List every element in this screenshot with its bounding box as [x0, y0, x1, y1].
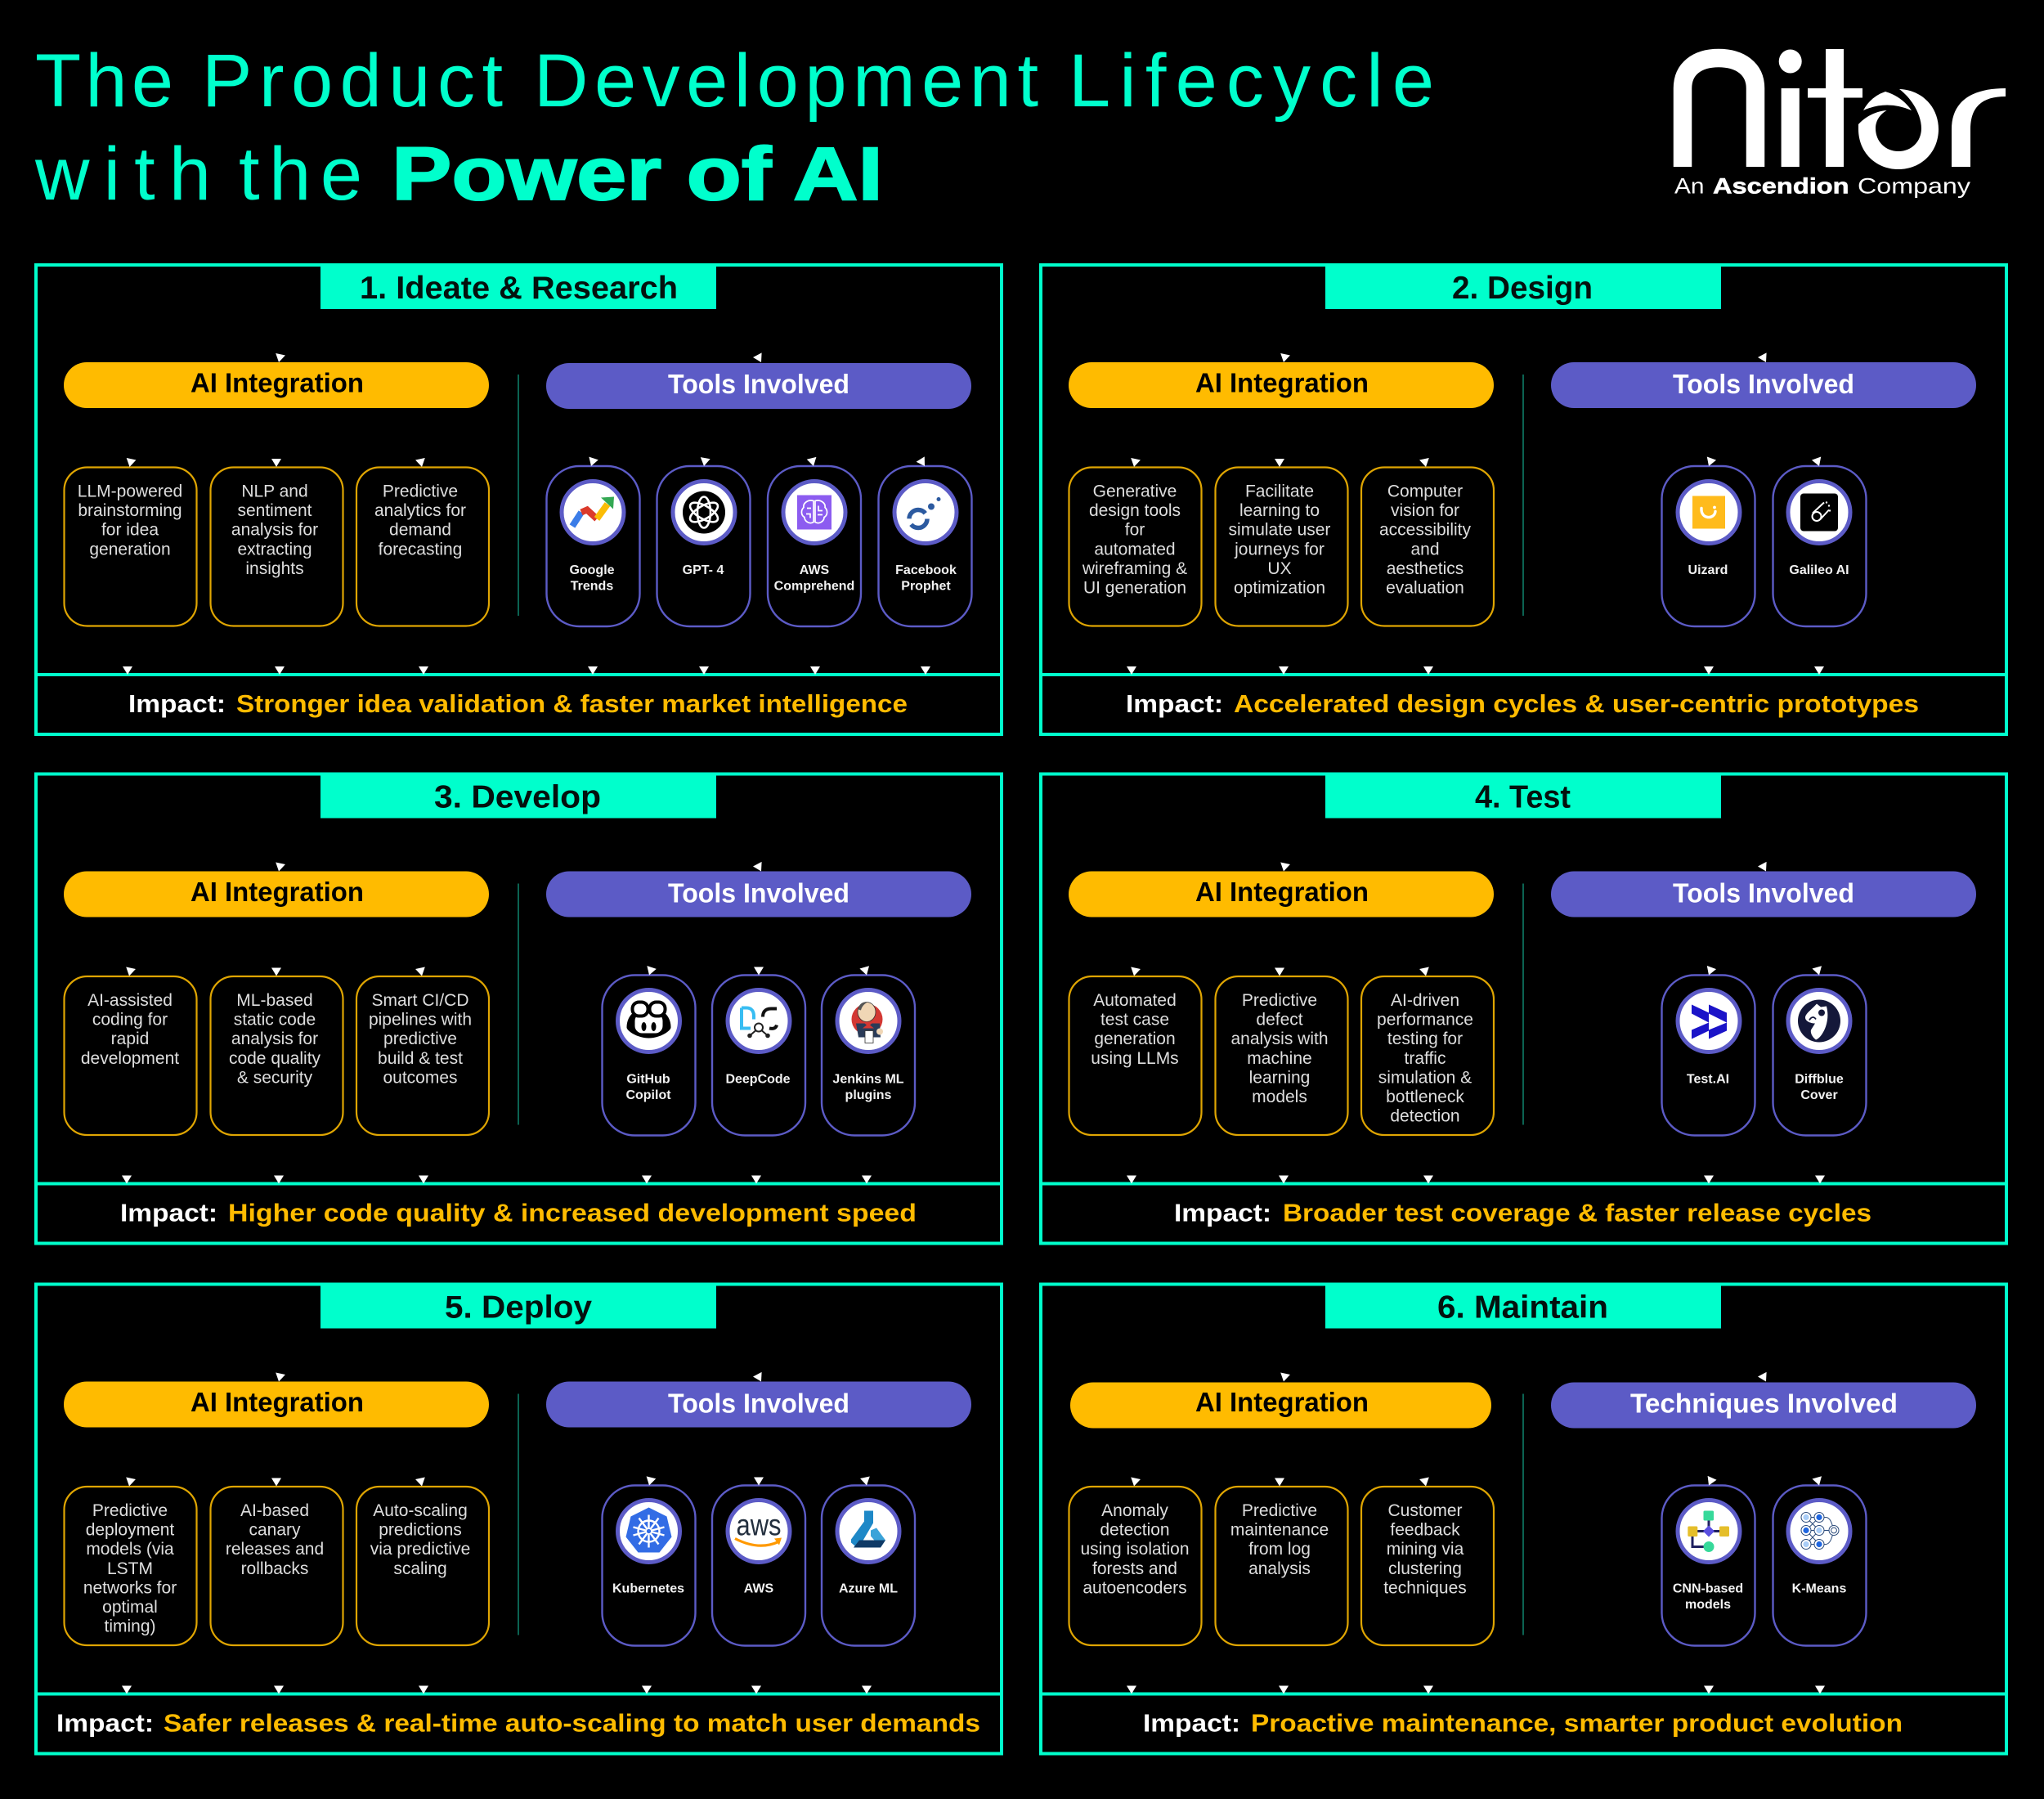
AI Integration pill	[1069, 362, 1494, 408]
AI integration box: Facilitate learning: optimization	[1234, 579, 1325, 597]
tool card: Uizard: Uizard	[1688, 563, 1728, 577]
AI integration box: Computer vision: evaluation	[1386, 579, 1464, 597]
AI integration box: ML-based static analysis: static code	[234, 1011, 316, 1030]
impact statement: Impact:	[1126, 689, 1223, 718]
AI integration box: AI-driven performance: traffic	[1405, 1049, 1446, 1068]
heading	[1325, 772, 1721, 818]
heading: 2. Design	[1452, 271, 1593, 306]
AI integration box: AI-based canary	[211, 1487, 343, 1645]
AI integration box: Predictive maintenance: maintenance	[1230, 1521, 1329, 1540]
tool card: Jenkins ML plugins: Jenkins ML	[832, 1073, 904, 1086]
AI integration box: Anomaly detection: using isolation	[1080, 1540, 1190, 1559]
heading: 5. Deploy	[445, 1290, 592, 1325]
impact statement: Broader test coverage & faster release cycles	[1283, 1199, 1871, 1227]
AI integration box: Anomaly detection: autoencoders	[1083, 1578, 1187, 1597]
AI integration box: Predictive deployment: Predictive	[92, 1501, 168, 1520]
flow arrows	[1127, 1372, 1825, 1694]
title: Product	[202, 39, 503, 123]
tool card: Azure ML	[822, 1485, 915, 1645]
AI integration box: Predictive maintenance	[1215, 1487, 1347, 1645]
AI integration box: Generative design: automated	[1094, 540, 1176, 559]
AI integration box: AI-based canary: rollbacks	[241, 1559, 308, 1578]
AI integration box: AI-driven performance: simulation &	[1378, 1068, 1472, 1087]
panel frame	[1041, 265, 2006, 734]
tool card: AWS Comprehend	[768, 466, 861, 626]
tool card: Facebook Prophet: Facebook	[895, 563, 957, 577]
tool card: AWS: aws	[736, 1508, 782, 1542]
AI integration box: Automated test case: generation	[1094, 1030, 1176, 1048]
AI integration box: Computer vision: Computer	[1387, 482, 1463, 500]
heading	[1325, 263, 1721, 309]
panel: 4. Test	[1041, 772, 2006, 1243]
title: Lifecycle	[1069, 39, 1434, 123]
tool card: Diffblue Cover: Cover	[1800, 1088, 1838, 1102]
AI Integration pill: AI Integration	[1195, 877, 1369, 907]
AI integration box: Anomaly detection: forests and	[1092, 1559, 1177, 1578]
AI integration box: AI-assisted coding	[64, 976, 196, 1135]
AI integration box: Anomaly detection: Anomaly	[1101, 1501, 1168, 1520]
AI integration box: ML-based static analysis: ML-based	[236, 991, 313, 1010]
tool card: Kubernetes	[602, 1485, 695, 1645]
AI integration box: Predictive analytics: demand	[389, 521, 451, 540]
heading: 4. Test	[1475, 780, 1571, 814]
impact divider	[1041, 1693, 2006, 1696]
section divider	[1522, 375, 1524, 616]
AI integration box: Auto-scaling: predictions	[379, 1521, 462, 1540]
Tools Involved pill: Tools Involved	[1673, 369, 1854, 399]
AI integration box: Predictive deployment: LSTM	[107, 1559, 153, 1578]
AI integration box: Smart CI/CD: outcomes	[383, 1068, 458, 1087]
AI integration box: AI-driven performance: detection	[1390, 1107, 1460, 1126]
tool card: GitHub Copilot	[602, 975, 695, 1135]
AI integration box: Predictive maintenance: analysis	[1248, 1559, 1311, 1578]
AI integration box: NLP: sentiment	[237, 501, 312, 520]
impact statement: Impact:	[56, 1709, 154, 1737]
tool card: GitHub Copilot: GitHub	[626, 1073, 670, 1086]
AI integration box: Predictive defect: defect	[1256, 1011, 1303, 1030]
section divider	[518, 375, 519, 616]
tool card: AWS: AWS	[744, 1581, 774, 1596]
tool card: Google Trends: Google	[569, 563, 615, 577]
panel frame	[1041, 1284, 2006, 1753]
AI integration box: Predictive deployment: timing)	[104, 1617, 156, 1636]
AI integration box: Smart CI/CD: Smart CI/CD	[371, 991, 469, 1010]
logo: Nitor, An Ascendion Company: Company	[1858, 174, 1971, 199]
AI integration box: LLM-powered: generation	[89, 540, 171, 559]
AI integration box: Computer vision: and	[1410, 540, 1440, 559]
AI integration box: Facilitate learning: learning to	[1239, 501, 1320, 520]
AI Integration pill	[1070, 1382, 1491, 1428]
panel: 5. Deploy	[36, 1282, 1002, 1753]
AI integration box: Anomaly detection	[1069, 1487, 1202, 1645]
AI integration box: Facilitate learning: Facilitate	[1245, 482, 1314, 500]
flow arrows	[1127, 352, 1824, 675]
Tools Involved pill	[546, 1382, 971, 1428]
impact divider	[36, 1693, 1002, 1696]
AI integration box: NLP: insights	[245, 559, 304, 578]
panel frame	[36, 265, 1002, 734]
Tools Involved pill: Tools Involved	[668, 1389, 849, 1418]
AI integration box: Customer feedback: mining via	[1387, 1540, 1464, 1559]
tool card: DeepCode	[712, 975, 805, 1135]
AI integration box: NLP: NLP and	[241, 482, 308, 500]
panel frame	[36, 1284, 1002, 1753]
tool card: Jenkins ML plugins	[822, 975, 915, 1135]
AI Integration pill	[64, 362, 489, 408]
AI integration box: AI-driven performance	[1361, 976, 1494, 1135]
AI integration box: Generative design	[1069, 468, 1202, 626]
tool card: Test.AI: Test.AI	[1687, 1073, 1729, 1086]
title: Power of AI	[392, 132, 883, 216]
AI integration box: ML-based static analysis: code quality	[229, 1049, 321, 1068]
panel: 6. Maintain	[1041, 1282, 2006, 1753]
AI integration box: Predictive deployment: deployment	[86, 1521, 174, 1540]
AI integration box: Anomaly detection: detection	[1100, 1521, 1170, 1540]
AI integration box: LLM-powered: LLM-powered	[78, 482, 182, 500]
Tools Involved pill	[546, 872, 971, 917]
AI integration box: Predictive defect	[1215, 976, 1347, 1135]
AI integration box: Facilitate learning: journeys for	[1234, 540, 1325, 559]
Tools Involved pill: Tools Involved	[668, 878, 849, 908]
heading: 1. Ideate & Research	[360, 271, 678, 306]
tool card: Google Trends: Trends	[571, 580, 613, 594]
AI integration box: ML-based static analysis	[211, 976, 343, 1135]
panel: 3. Develop	[36, 772, 1002, 1243]
AI integration box: Automated test case: Automated	[1093, 991, 1177, 1010]
AI integration box: Predictive maintenance: from log	[1248, 1540, 1311, 1559]
AI integration box: Predictive defect: learning	[1249, 1068, 1310, 1087]
AI integration box: NLP: extracting	[237, 540, 312, 559]
AI integration box: Generative design: for	[1125, 521, 1145, 540]
flow arrows	[122, 862, 872, 1184]
tool card: GPT-4	[657, 466, 751, 626]
AI Integration pill	[64, 1382, 489, 1428]
heading	[320, 772, 716, 818]
AI integration box: Auto-scaling	[356, 1487, 489, 1645]
tool card: Diffblue Cover	[1773, 975, 1866, 1135]
AI integration box: AI-driven performance: AI-driven	[1391, 991, 1459, 1010]
flow arrows	[123, 352, 930, 675]
AI integration box: AI-driven performance: performance	[1377, 1011, 1473, 1030]
Tools Involved pill: Tools Involved	[668, 369, 849, 399]
impact statement: Impact:	[128, 689, 226, 718]
tool card: DeepCode: DeepCode	[725, 1073, 791, 1086]
AI integration box: AI-based canary: canary	[249, 1521, 301, 1540]
AI integration box: LLM-powered	[64, 468, 196, 626]
title: with	[34, 132, 211, 216]
AI integration box: Smart CI/CD	[356, 976, 489, 1135]
tool card: AWS	[712, 1485, 805, 1645]
AI integration box: Smart CI/CD: predictive	[383, 1030, 457, 1048]
logo: Nitor, An Ascendion Company	[1674, 49, 2006, 199]
AI integration box: Customer feedback: techniques	[1383, 1578, 1467, 1597]
Tools Involved pill: Tools Involved	[1673, 878, 1854, 908]
flow arrows	[1127, 862, 1825, 1184]
tool card: Diffblue Cover: Diffblue	[1795, 1073, 1844, 1086]
tool card: Jenkins ML plugins: plugins	[845, 1088, 892, 1102]
tool card: Facebook Prophet: Prophet	[901, 580, 951, 594]
AI integration box: Customer feedback	[1361, 1487, 1494, 1645]
AI integration box: Generative design: design tools	[1089, 501, 1181, 520]
impact statement: Accelerated design cycles & user-centric prototypes	[1234, 689, 1919, 718]
title: the	[239, 132, 362, 216]
heading	[320, 1282, 716, 1328]
AI integration box: Facilitate learning: UX	[1267, 559, 1292, 578]
heading	[320, 263, 716, 309]
AI integration box: LLM-powered: brainstorming	[78, 501, 182, 520]
panel frame	[1041, 774, 2006, 1243]
tool card: AWS Comprehend: Comprehend	[774, 580, 854, 594]
AI integration box: Predictive defect: Predictive	[1242, 991, 1317, 1010]
title	[34, 39, 1434, 216]
Tools Involved pill	[1551, 362, 1976, 408]
flow arrows	[122, 1372, 872, 1694]
Techniques Involved pill: Techniques Involved	[1630, 1389, 1898, 1418]
AI integration box: Predictive deployment: models (via	[86, 1540, 174, 1559]
AI integration box: AI-assisted coding: rapid	[111, 1030, 149, 1048]
technique card: CNN-based models	[1661, 1485, 1755, 1645]
AI integration box: Auto-scaling: via predictive	[370, 1540, 470, 1559]
AI Integration pill: AI Integration	[191, 1387, 364, 1417]
AI Integration pill: AI Integration	[1195, 1387, 1369, 1417]
panel frame	[36, 774, 1002, 1243]
AI integration box: Predictive analytics: analytics for	[374, 501, 466, 520]
title: Development	[534, 39, 1038, 123]
AI integration box: ML-based static analysis: & security	[237, 1068, 313, 1087]
impact divider	[36, 1182, 1002, 1186]
AI integration box: Facilitate learning	[1215, 468, 1347, 626]
tool card: AWS Comprehend: AWS	[800, 563, 830, 577]
AI integration box: NLP	[211, 468, 343, 626]
technique card: CNN-based models: CNN-based	[1673, 1581, 1743, 1596]
AI integration box: Smart CI/CD: build & test	[378, 1049, 463, 1068]
AI integration box: Customer feedback: feedback	[1390, 1521, 1460, 1540]
Techniques Involved pill	[1551, 1382, 1976, 1428]
impact statement: Impact:	[1143, 1709, 1240, 1737]
AI integration box: Predictive maintenance: Predictive	[1242, 1501, 1317, 1520]
tool card: Galileo AI: Galileo AI	[1789, 563, 1849, 577]
AI integration box: Automated test case: using LLMs	[1091, 1049, 1179, 1068]
AI integration box: Auto-scaling: Auto-scaling	[373, 1501, 468, 1520]
impact statement: Impact:	[1174, 1199, 1271, 1227]
AI integration box: AI-assisted coding: coding for	[92, 1011, 168, 1030]
panel: 2. Design	[1041, 263, 2006, 734]
AI integration box: Automated test case: test case	[1100, 1011, 1169, 1030]
AI integration box: Predictive defect: models	[1252, 1088, 1307, 1106]
AI integration box: Predictive analytics: forecasting	[379, 540, 462, 559]
tool card: Google Trends	[546, 466, 639, 626]
section divider	[518, 1393, 519, 1635]
AI integration box: Smart CI/CD: pipelines with	[369, 1011, 472, 1030]
AI integration box: LLM-powered: for idea	[101, 521, 159, 540]
AI integration box: Computer vision: aesthetics	[1387, 559, 1464, 578]
panel: 1. Ideate & Research	[36, 263, 1002, 734]
Tools Involved pill	[546, 363, 971, 409]
impact statement: Proactive maintenance, smarter product evolution	[1251, 1709, 1903, 1737]
AI Integration pill	[1069, 872, 1494, 917]
AI integration box: Generative design: UI generation	[1083, 579, 1186, 597]
tool card: GitHub Copilot: Copilot	[625, 1088, 671, 1102]
AI integration box: Automated test case	[1069, 976, 1202, 1135]
AI integration box: AI-driven performance: bottleneck	[1386, 1088, 1464, 1106]
AI integration box: ML-based static analysis: analysis for	[231, 1030, 318, 1048]
AI integration box: Predictive defect: analysis with	[1230, 1030, 1329, 1048]
AI integration box: Computer vision: accessibility	[1379, 521, 1472, 540]
impact divider	[1041, 1182, 2006, 1186]
AI integration box: Predictive deployment	[64, 1487, 196, 1645]
AI integration box: Computer vision	[1361, 468, 1494, 626]
technique card: CNN-based models: models	[1685, 1598, 1731, 1612]
AI integration box: Facilitate learning: simulate user	[1229, 521, 1330, 540]
Tools Involved pill	[1551, 872, 1976, 917]
technique card: K-Means	[1773, 1485, 1866, 1645]
AI integration box: Customer feedback: Customer	[1387, 1501, 1463, 1520]
AI integration box: AI-based canary: AI-based	[240, 1501, 309, 1520]
impact statement: Stronger idea validation & faster market intelligence	[236, 689, 908, 718]
tool card: Galileo AI	[1773, 466, 1866, 626]
impact statement: Higher code quality & increased development speed	[228, 1199, 917, 1227]
AI integration box: Predictive defect: machine	[1247, 1049, 1312, 1068]
title: The	[35, 39, 173, 123]
AI integration box: Generative design: wireframing &	[1082, 559, 1187, 578]
AI integration box: Generative design: Generative	[1093, 482, 1177, 500]
technique card: K-Means: K-Means	[1792, 1581, 1846, 1596]
AI integration box: Computer vision: vision for	[1391, 501, 1459, 520]
AI integration box: Predictive deployment: optimal	[102, 1598, 158, 1617]
tool card: Azure ML: Azure ML	[839, 1581, 898, 1596]
tool card: Kubernetes: Kubernetes	[612, 1581, 684, 1596]
heading	[1325, 1282, 1721, 1328]
AI integration box: Customer feedback: clustering	[1388, 1559, 1462, 1578]
logo: Nitor, An Ascendion Company: An	[1674, 174, 1704, 199]
AI integration box: NLP: analysis for	[231, 521, 318, 540]
AI Integration pill: AI Integration	[1195, 368, 1369, 397]
AI integration box: Auto-scaling: scaling	[393, 1559, 447, 1578]
impact statement: Impact:	[120, 1199, 217, 1227]
AI Integration pill: AI Integration	[191, 877, 364, 907]
section divider	[1522, 1393, 1524, 1635]
AI integration box: AI-assisted coding: AI-assisted	[87, 991, 173, 1010]
section divider	[1522, 883, 1524, 1125]
logo: Nitor, An Ascendion Company: Ascendion	[1713, 174, 1849, 199]
AI integration box: AI-based canary: releases and	[226, 1540, 324, 1559]
AI integration box: AI-driven performance: testing for	[1387, 1030, 1463, 1048]
AI Integration pill	[64, 872, 489, 917]
heading: 3. Develop	[434, 780, 601, 814]
impact divider	[1041, 673, 2006, 676]
impact divider	[36, 673, 1002, 676]
impact statement: Safer releases & real-time auto-scaling to match user demands	[164, 1709, 980, 1737]
AI integration box: Predictive analytics: Predictive	[383, 482, 458, 500]
section divider	[518, 883, 519, 1125]
AI Integration pill: AI Integration	[191, 368, 364, 397]
heading: 6. Maintain	[1437, 1290, 1608, 1325]
tool card: GPT-4: GPT- 4	[683, 563, 724, 577]
tool card: Uizard	[1661, 466, 1755, 626]
AI integration box: AI-assisted coding: development	[81, 1049, 179, 1068]
tool card: Facebook Prophet	[878, 466, 971, 626]
tool card: Test.AI	[1661, 975, 1755, 1135]
AI integration box: Predictive analytics	[356, 468, 489, 626]
AI integration box: Predictive deployment: networks for	[83, 1578, 177, 1597]
